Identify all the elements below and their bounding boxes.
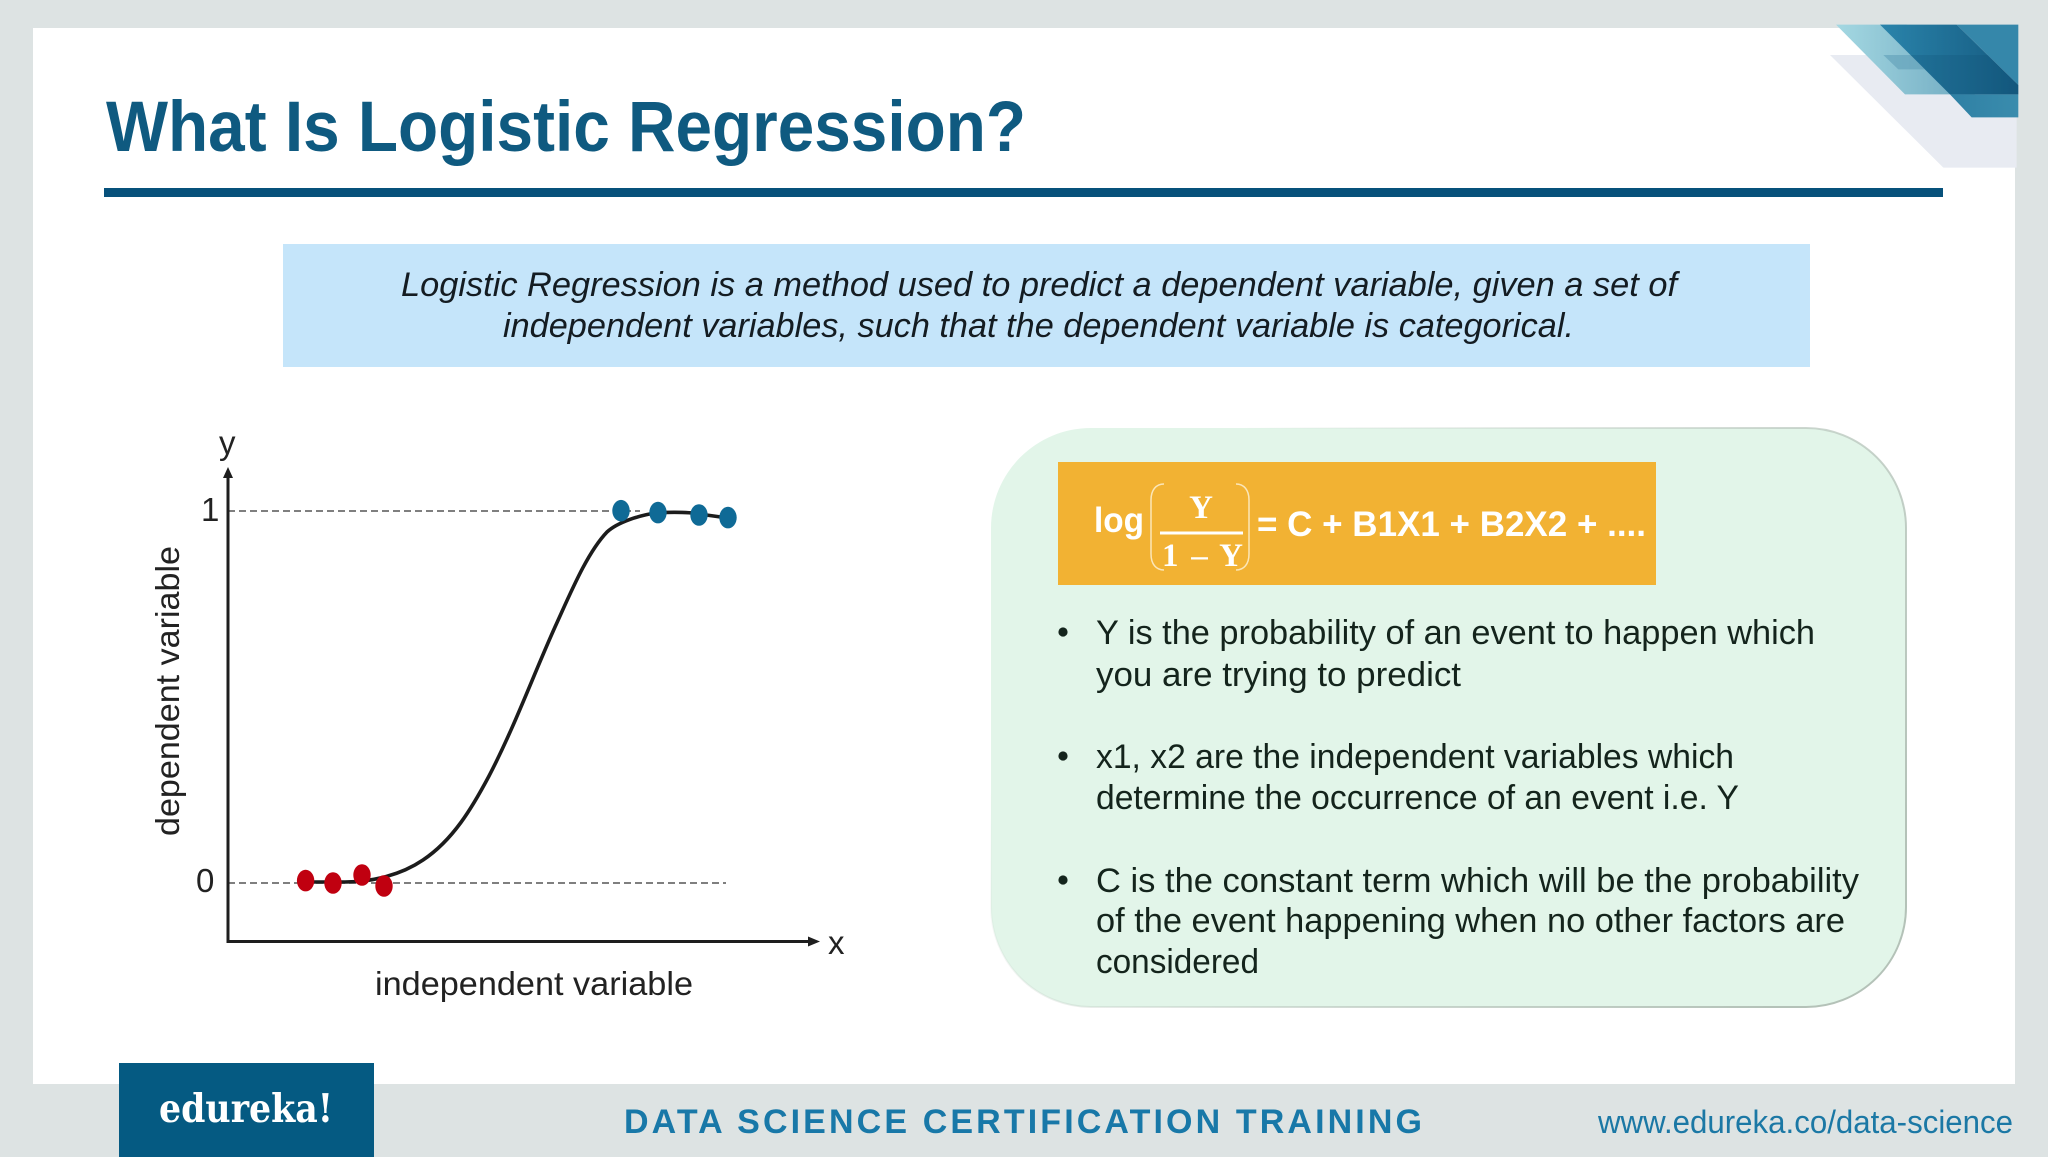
axis labels [149,424,845,1002]
corner decoration [1830,25,2018,168]
logistic regression chart [149,424,845,1002]
axis labels: 0 [196,862,214,899]
bullet list [1058,614,1859,981]
bullet list: determine the occurrence of an event i.e. Y [1096,779,1739,817]
footer title: DATA SCIENCE CERTIFICATION TRAINING [624,1103,1422,1141]
axis labels: independent variable [375,965,693,1002]
bullet list: x1, x2 are the independent variables which [1096,738,1734,776]
formula box: log [1094,501,1144,540]
definition banner [283,244,1810,367]
axis labels: 1 [201,491,219,528]
definition banner: independent variables, such that the dependent variable is categorical. [503,307,1574,345]
axis labels: dependent variable [149,546,186,836]
formula box [1058,462,1656,585]
dashed guide lines [228,511,726,883]
header rule [104,188,1943,197]
logo: edureka: edureka! [159,1086,333,1132]
bullet list: considered [1096,943,1259,981]
definition banner: Logistic Regression is a method used to predict a dependent variable, given a set of [401,266,1681,304]
bullet list: you are trying to predict [1096,656,1462,694]
axis labels: y [219,424,236,461]
bullet list: of the event happening when no other factors are [1096,902,1845,940]
bullet list: Y is the probability of an event to happen which [1096,614,1815,652]
blue data points [612,500,737,528]
formula box: Y [1189,490,1213,526]
formula box: 1 – Y [1162,538,1243,574]
title: What Is Logistic Regression? [106,88,1026,167]
axes [227,474,812,943]
bullet list: C is the constant term which will be the probability [1096,862,1859,900]
footer url: www.edureka.co/data-science [1597,1104,2013,1140]
axis labels: x [828,924,845,961]
y axis arrowhead [223,467,233,478]
panel: explanation [991,428,1906,1007]
logo: edureka [119,1063,374,1157]
red data points [297,864,393,897]
sigmoid curve [305,512,728,882]
formula box: = C + B1X1 + B2X2 + .... [1257,505,1646,544]
x axis arrowhead [808,936,820,946]
